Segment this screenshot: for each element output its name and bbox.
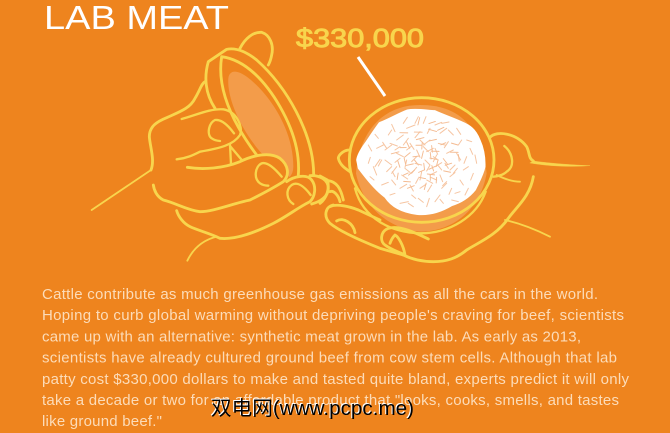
fingers — [320, 176, 343, 203]
lid rim — [206, 32, 314, 175]
dish shadow — [356, 105, 487, 232]
beef texture — [368, 117, 477, 207]
body paragraph — [42, 286, 630, 430]
body paragraph: take a decade or two for an affordable product that "looks, cooks, smells, and tastes — [42, 392, 619, 409]
watermark: 双电网(www.pcpc.me) — [211, 397, 414, 420]
lid inner highlight — [228, 72, 293, 177]
ground beef — [357, 109, 485, 215]
pointer line — [358, 57, 385, 96]
price label: $330,000 — [296, 23, 424, 53]
illustration: right hand holding dish of ground beef — [320, 98, 590, 262]
illustration: left hand holding lid — [92, 32, 328, 261]
watermark: 双电网(www.pcpc.me) — [210, 396, 413, 419]
body paragraph: came up with an alternative: synthetic meat grown in the lab. As early as 2013, — [42, 328, 581, 345]
title: LAB MEAT — [44, 0, 229, 36]
body paragraph: Cattle contribute as much greenhouse gas emissions as all the cars in the world. — [42, 286, 598, 303]
body paragraph: Hoping to curb global warming without depriving people's craving for beef, scientists — [42, 307, 624, 324]
upper finger and spike — [490, 134, 533, 161]
hand outline — [149, 82, 205, 170]
dish rim — [349, 98, 494, 222]
body paragraph: patty cost $330,000 dollars to make and tasted quite bland, experts predict it will only — [42, 371, 630, 388]
body paragraph: like ground beef." — [42, 413, 162, 430]
palm edge — [403, 177, 533, 262]
body paragraph: scientists have already cultured ground beef from cow stem cells. Although that lab — [42, 350, 617, 366]
beef texture, inner layer — [376, 108, 470, 203]
